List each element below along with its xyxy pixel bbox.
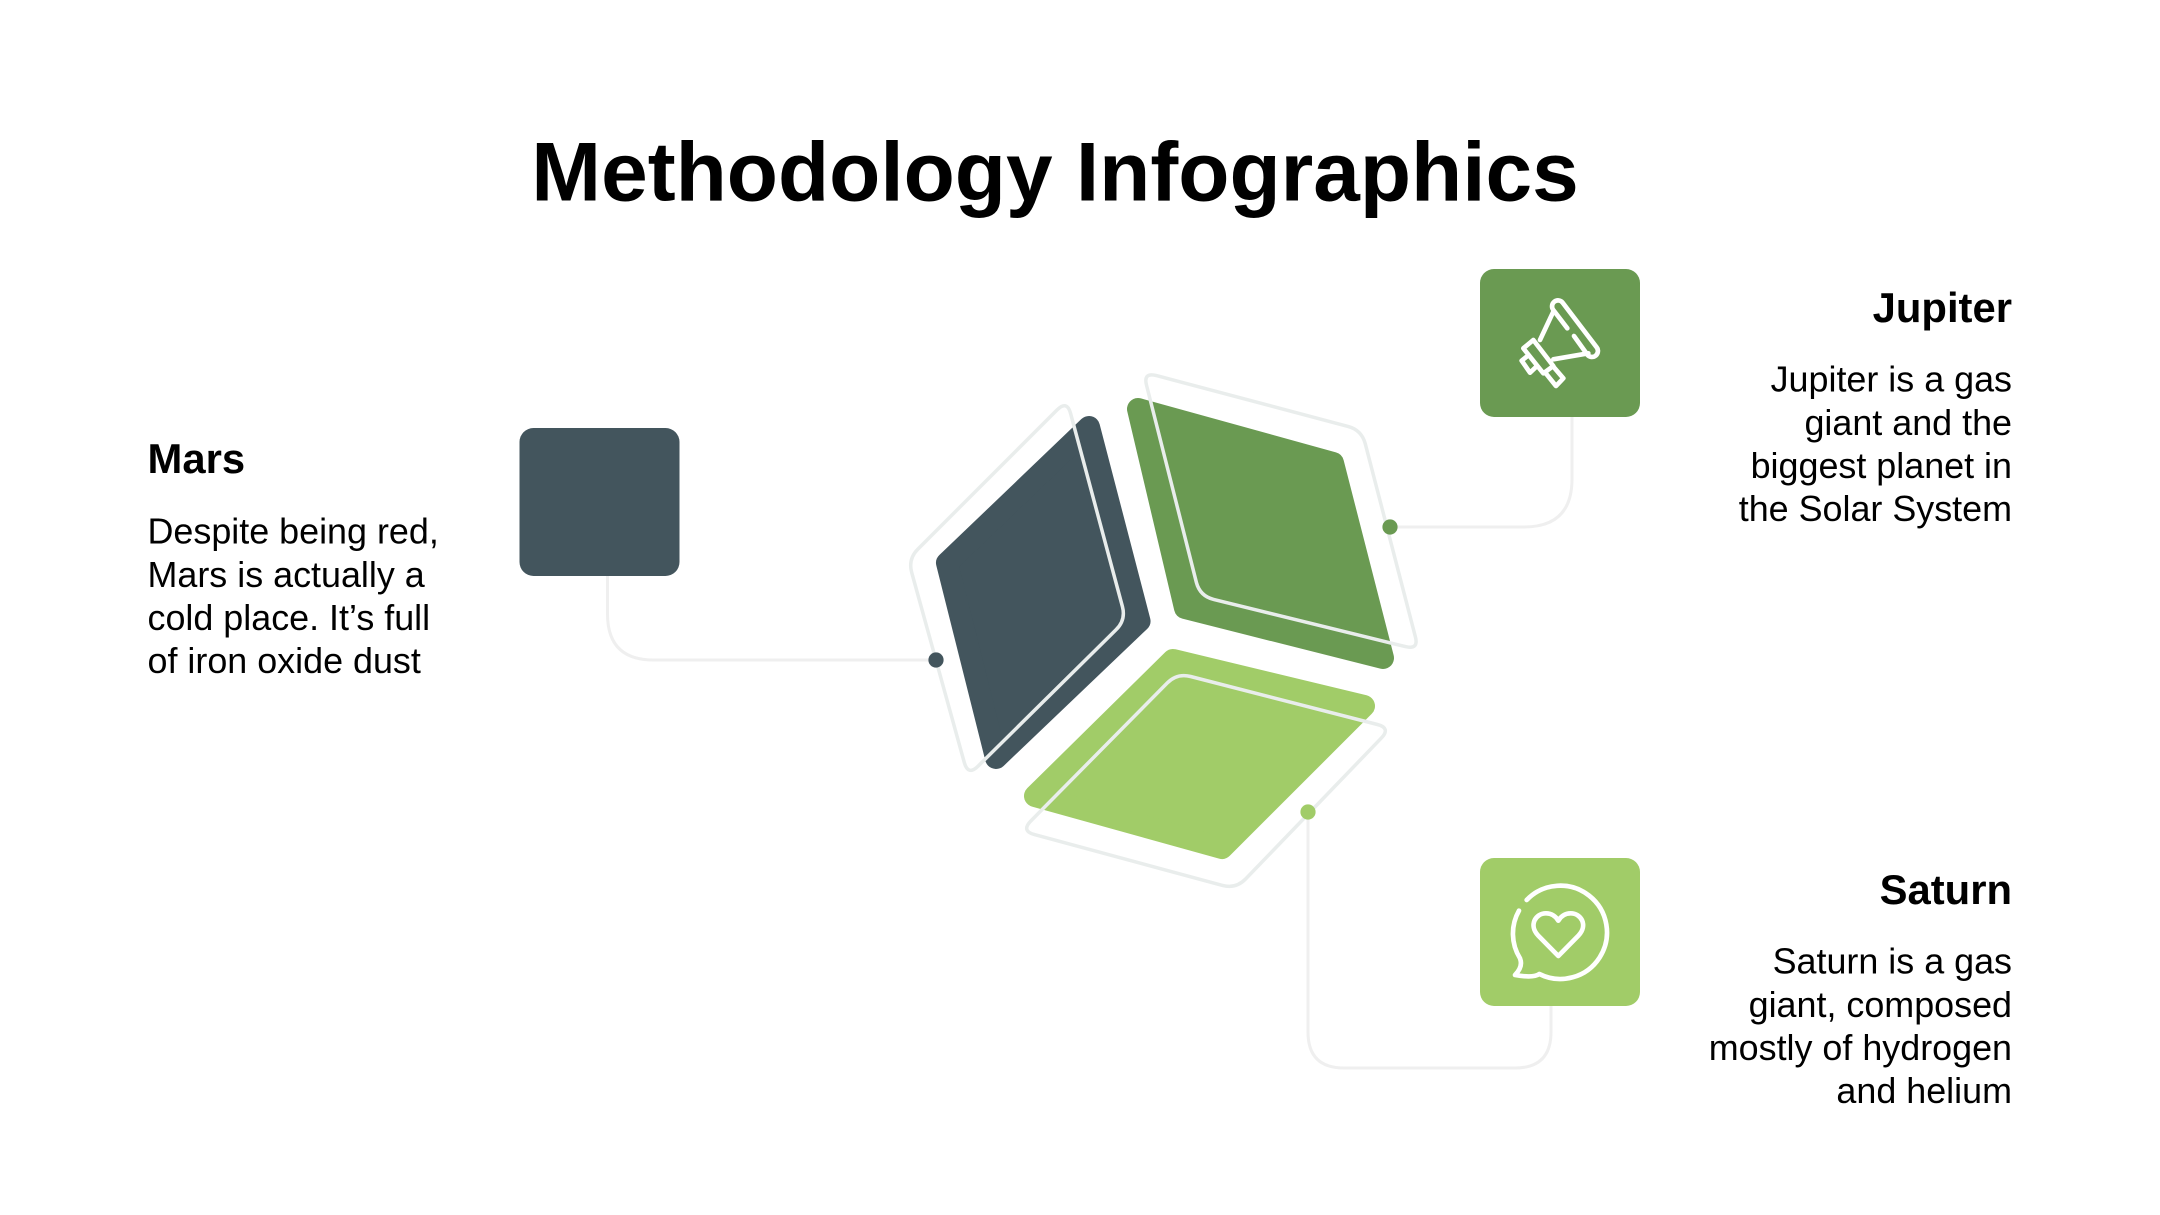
text block: Jupiter: biggest planet in (1751, 446, 2012, 486)
text block: Mars (148, 435, 439, 681)
outline: dark face (911, 406, 1123, 770)
connector: Saturn (1308, 812, 1551, 1068)
text block: Saturn: Saturn (1880, 866, 2012, 913)
cube face: green (1138, 409, 1383, 658)
icon box: Mars (520, 428, 680, 576)
dot: Mars (928, 652, 944, 668)
icon: chat bubble with heart (1513, 886, 1607, 979)
cube face: light green (1035, 660, 1364, 848)
cube diagram (911, 375, 1416, 886)
connector: Mars (608, 576, 936, 660)
text block: Jupiter (1739, 284, 2012, 529)
icon box: Jupiter megaphone (1480, 269, 1640, 417)
text block: Saturn: and helium (1836, 1071, 2012, 1111)
text block: Mars: cold place. It’s full (148, 598, 430, 638)
text block: Mars: of iron oxide dust (148, 641, 421, 681)
icon box: Saturn chat heart (1480, 858, 1640, 1006)
dot: Jupiter (1382, 519, 1398, 535)
text block: Saturn: Saturn is a gas (1773, 942, 2012, 982)
text block: Saturn: giant, composed (1749, 985, 2012, 1025)
cube face: dark (947, 427, 1140, 758)
title: Methodology Infographics (531, 124, 1579, 218)
dot: Saturn (1300, 804, 1316, 820)
text block: Jupiter: the Solar System (1739, 489, 2012, 529)
text block: Jupiter: Jupiter (1873, 284, 2012, 331)
text block: Jupiter: Jupiter is a gas (1771, 360, 2012, 400)
connector: Jupiter (1390, 417, 1572, 527)
text block: Saturn (1709, 866, 2012, 1111)
text block: Jupiter: giant and the (1804, 403, 2012, 443)
text block: Mars: Despite being red, (148, 512, 439, 552)
text block: Saturn: mostly of hydrogen (1709, 1028, 2012, 1068)
outline: green face (1146, 375, 1416, 647)
outline: light face (1027, 676, 1385, 886)
text block: Mars: Mars (148, 435, 245, 482)
icon: megaphone (1522, 300, 1598, 386)
text block: Mars: Mars is actually a (148, 555, 425, 595)
